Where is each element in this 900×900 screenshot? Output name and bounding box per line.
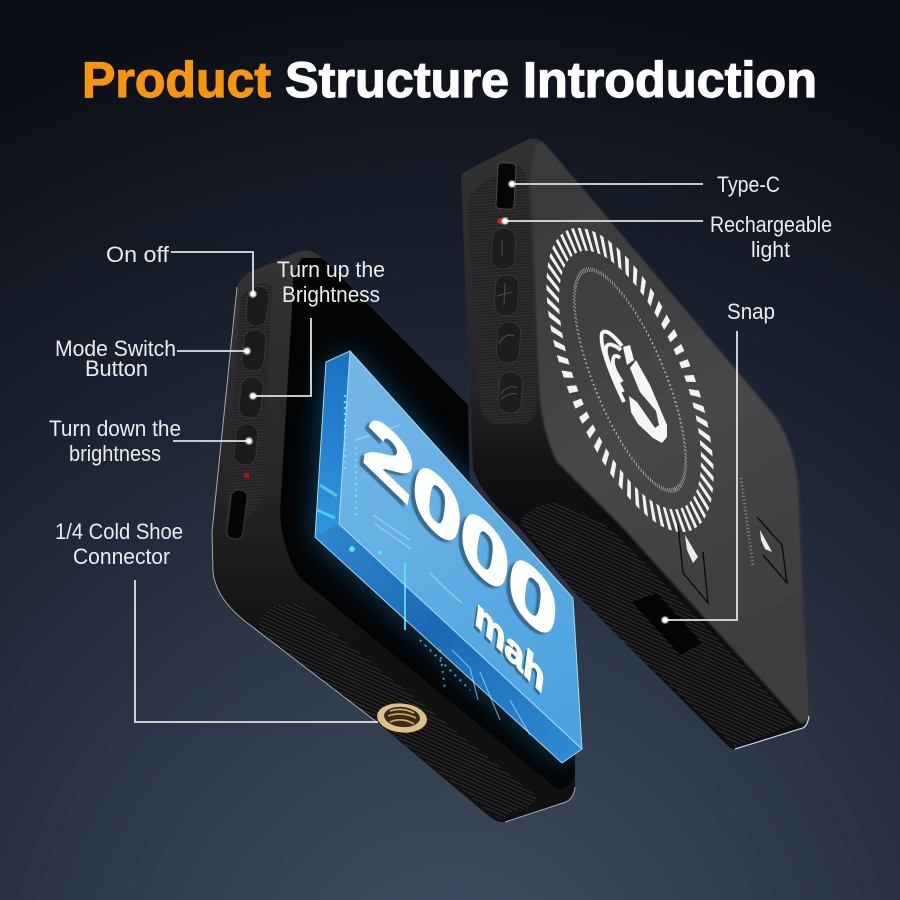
right device: back view xyxy=(461,138,810,749)
leader: on off xyxy=(171,252,253,294)
leader: type-c xyxy=(512,183,703,185)
label: cold shoe connector: Connector xyxy=(73,544,170,569)
ribbed button strip xyxy=(225,282,272,535)
red indicator light xyxy=(497,218,503,224)
magnet upper pole block xyxy=(623,345,634,365)
label: cold shoe connector: 1/4 Cold Shoe xyxy=(55,519,183,544)
label: snap: Snap xyxy=(727,299,775,324)
magnetic field arcs xyxy=(601,332,624,402)
label: turn down the brightness: Turn down the xyxy=(49,416,181,441)
label: mode switch button: Mode Switch xyxy=(55,336,176,361)
bottom corner highlight xyxy=(735,716,809,749)
left face xyxy=(315,351,350,537)
magnet horseshoe xyxy=(629,360,667,443)
block outline xyxy=(315,351,582,763)
label: turn up the brightness: Turn up the xyxy=(277,257,385,282)
usb-c port xyxy=(226,489,248,540)
button icons xyxy=(497,240,517,399)
magnetic face xyxy=(531,142,810,723)
magnet icon xyxy=(601,332,667,443)
capacity shadow: 2000 xyxy=(356,396,558,662)
callout leader lines xyxy=(135,181,737,722)
blue glow xyxy=(313,351,582,763)
capacity value: 2000 xyxy=(360,394,562,660)
device shell xyxy=(212,250,575,822)
label: mode switch button xyxy=(55,336,176,381)
label: rechargeable light: light xyxy=(751,237,790,262)
label: cold shoe connector xyxy=(55,519,183,569)
tick ring xyxy=(521,218,739,542)
leader: turn down xyxy=(173,440,249,442)
capacity unit shadow: mah xyxy=(471,592,545,705)
small corner marks xyxy=(678,517,787,603)
battery block xyxy=(315,351,582,763)
label: turn up the brightness xyxy=(277,257,385,307)
snap slot xyxy=(632,593,702,655)
small white mark xyxy=(685,530,772,563)
label: type-c: Type-C xyxy=(717,172,780,197)
cyan highlights xyxy=(317,395,470,690)
leader: mode switch xyxy=(177,350,247,352)
inner cavity xyxy=(280,258,575,788)
label: turn up the brightness: Brightness xyxy=(282,282,380,307)
label: turn down the brightness: brightness xyxy=(69,441,161,466)
label: rechargeable light: Rechargeable xyxy=(710,212,832,237)
leader: cold shoe xyxy=(135,580,378,722)
leader: snap xyxy=(665,331,737,620)
device body xyxy=(461,138,810,749)
title: Product xyxy=(82,52,271,108)
ribbed button strip xyxy=(467,165,537,424)
leader: turn up xyxy=(253,318,311,396)
title: Structure Introduction xyxy=(285,52,817,108)
outer edge highlight xyxy=(212,287,575,822)
leader dots xyxy=(244,181,668,623)
bottom face xyxy=(315,524,582,763)
gold tripod mount xyxy=(376,701,428,735)
red indicator xyxy=(244,473,249,478)
ribbed bottom panel xyxy=(258,604,537,820)
inner dotted ring xyxy=(552,256,708,504)
leader: rechargeable light xyxy=(505,220,703,222)
label: rechargeable light xyxy=(710,212,832,262)
type-c port xyxy=(496,163,516,209)
buttons xyxy=(233,285,270,466)
label: on off: On off xyxy=(106,242,170,267)
label: mode switch button: Button xyxy=(85,356,148,381)
label: turn down the brightness xyxy=(49,416,181,466)
ribbed side panel xyxy=(520,503,795,747)
circuit traces xyxy=(356,425,530,735)
top face xyxy=(339,351,582,749)
left device: battery cutaway xyxy=(212,250,582,822)
buttons xyxy=(491,227,523,414)
capacity unit: mah xyxy=(473,590,547,703)
dotted marks xyxy=(741,478,753,565)
